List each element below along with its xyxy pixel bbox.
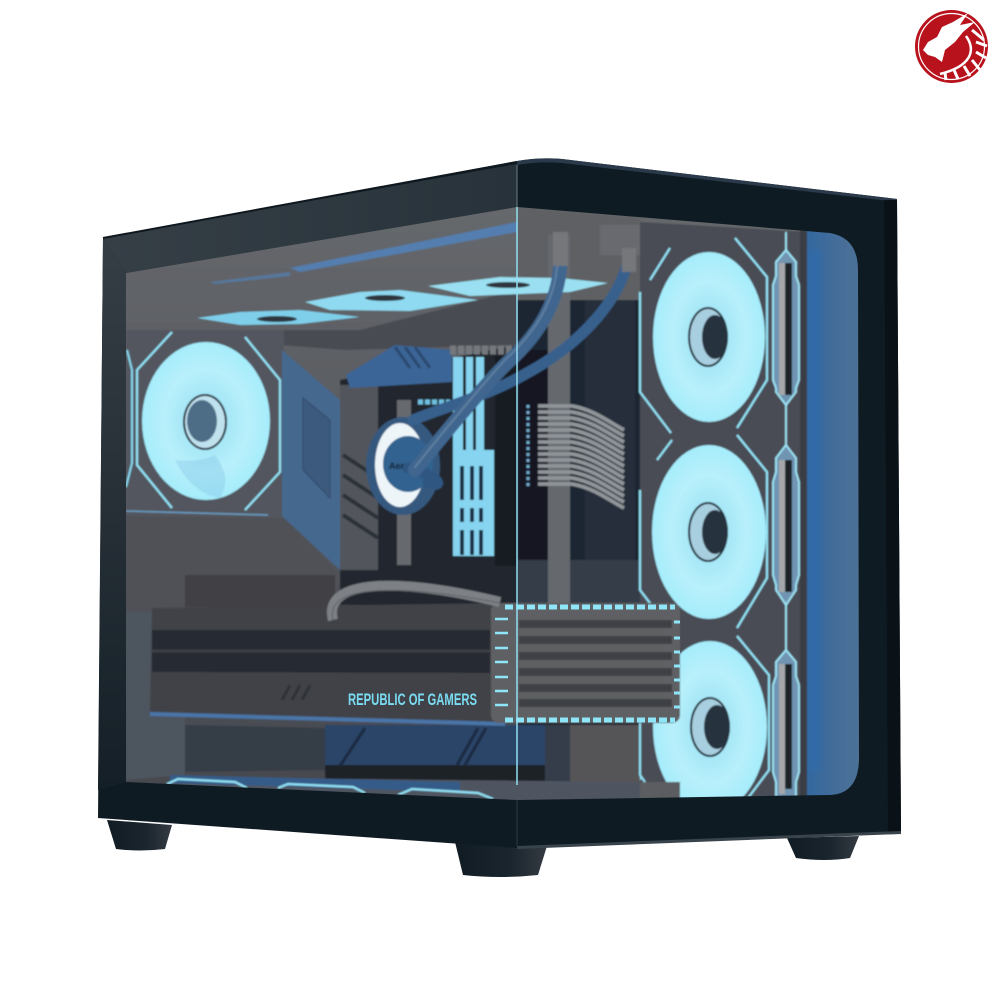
above GPU dark block [185,575,335,607]
bottom fan accents [167,779,493,799]
blue lighting streaks [210,222,516,284]
fan frame lights [640,238,769,798]
foot: middle [455,842,547,877]
power cable [332,586,500,620]
AIO pump [366,417,440,515]
fans [652,252,767,813]
left glass frame [98,162,517,790]
icon: bottom fan [653,641,767,813]
interior [120,200,870,813]
glass corner edge [516,165,518,846]
GPU end shroud [491,603,680,723]
product illustration: PC case [98,10,988,877]
cable comb [538,406,624,508]
feet [107,820,859,877]
rear blue window [806,231,859,796]
foot: left [107,820,172,850]
GPU LED strip [495,607,680,720]
AIO tubes [408,232,636,484]
RAM [453,357,494,556]
blue side plate [282,350,340,570]
icon: left fan [142,342,270,500]
side vents [773,232,799,800]
motherboard area [340,345,519,605]
GPU label: REPUBLIC OF GAMERS [348,690,477,709]
below GPU panel [170,725,680,805]
logo: red dragon badge [915,10,988,83]
left fan bracket [126,330,284,515]
icon: top fan [653,252,765,422]
GPU body [150,603,505,722]
top fan underside [284,294,516,350]
fan tray [640,222,806,800]
AIO pump: Aer [389,461,405,471]
foot: right [787,836,859,860]
icon: middle fan [652,445,766,619]
right centre area [518,208,641,726]
GPU [150,586,680,726]
lower left panel [126,516,340,612]
case body [98,158,901,849]
top fans [197,277,608,325]
